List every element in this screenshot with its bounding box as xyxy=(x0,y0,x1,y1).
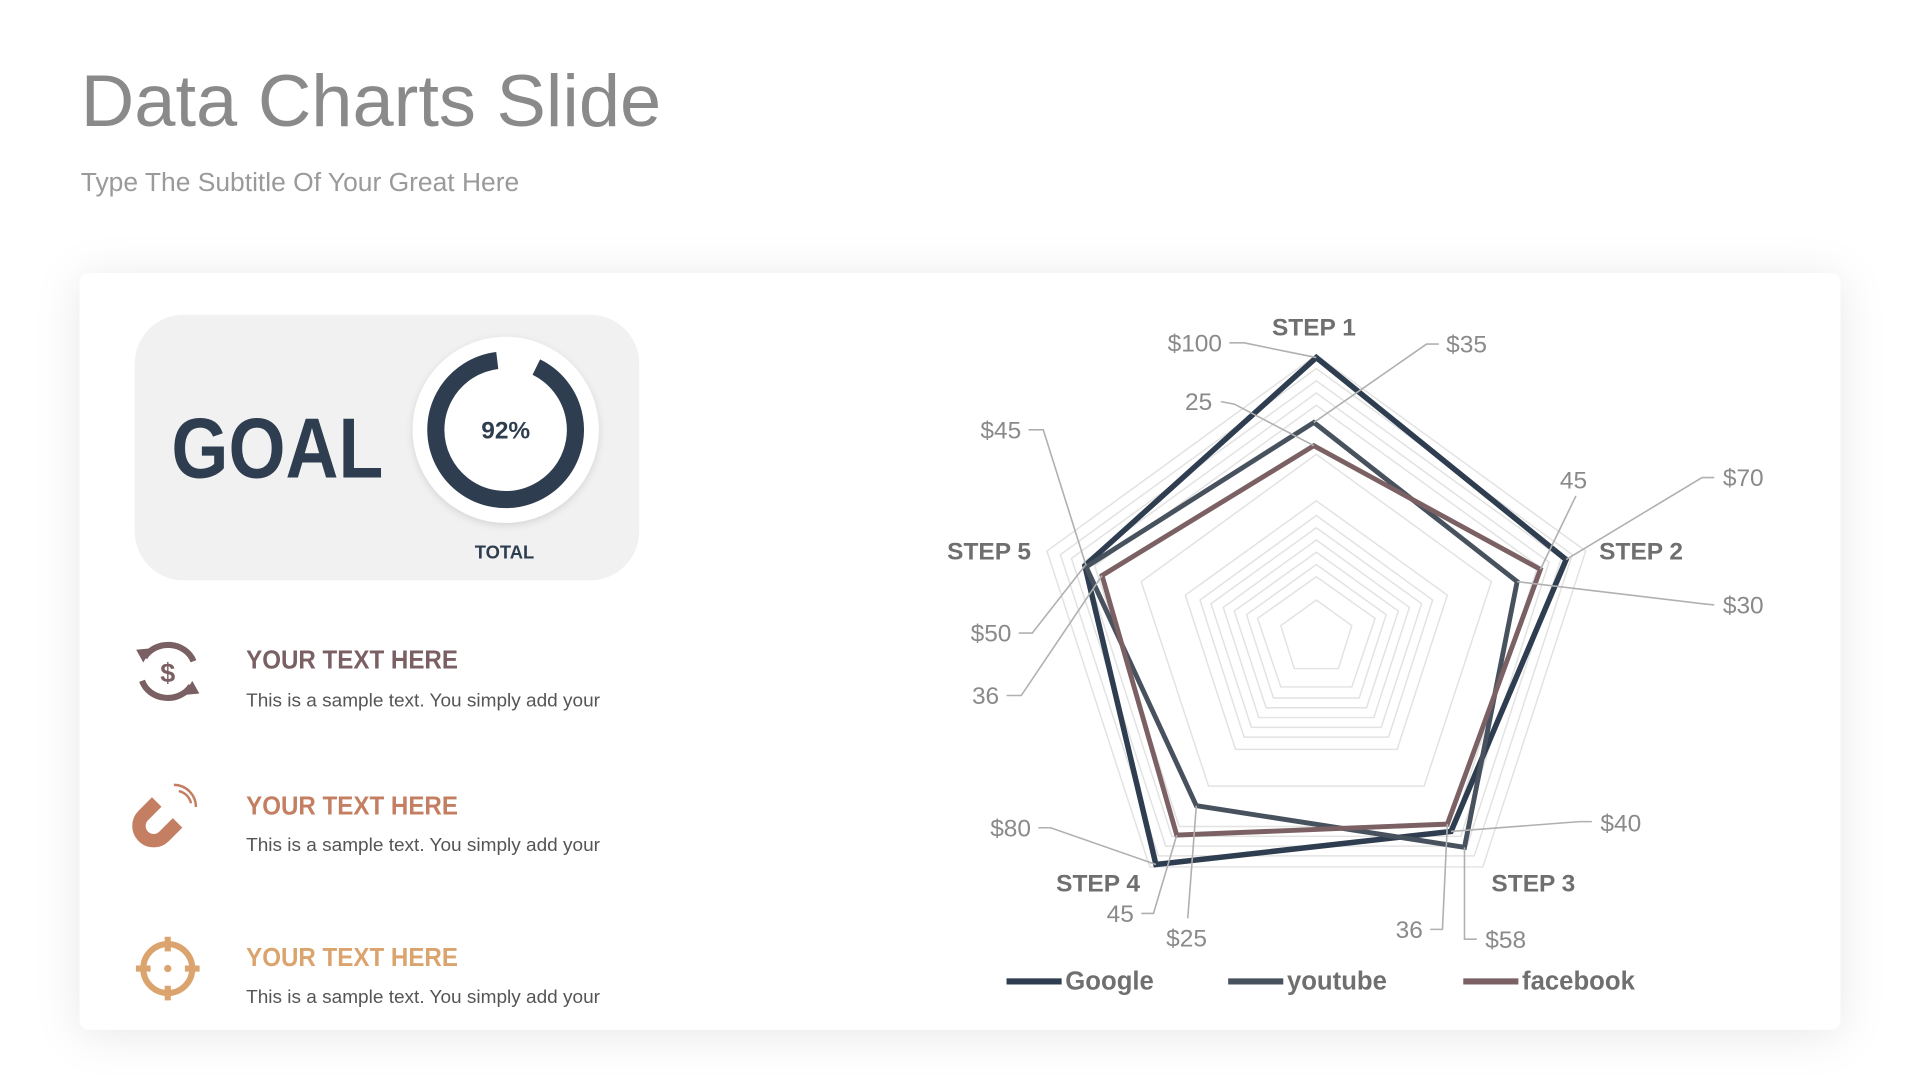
panel: main card xyxy=(80,273,1840,1030)
donut chart 92% xyxy=(413,337,599,523)
value labels: $35 xyxy=(1446,332,1487,359)
value labels: $80 xyxy=(990,815,1031,842)
donut chart 92%: 92% xyxy=(481,417,530,444)
value labels xyxy=(971,330,1764,954)
icon: target xyxy=(136,937,200,1000)
value labels: $30 xyxy=(1723,592,1764,619)
body: This is a sample text. You simply add your xyxy=(246,690,600,711)
step labels: STEP 2 xyxy=(1599,539,1683,566)
item 3 xyxy=(136,937,600,1007)
icon: magnet xyxy=(139,785,196,841)
value labels: $58 xyxy=(1485,927,1526,954)
value labels: 25 xyxy=(1185,389,1212,416)
value labels: 36 xyxy=(1396,917,1423,944)
value labels: 45 xyxy=(1560,468,1587,495)
item 2 xyxy=(139,785,600,855)
value labels: $100 xyxy=(1168,330,1222,357)
value labels: $70 xyxy=(1723,465,1764,492)
goal heading: GOAL xyxy=(171,401,383,497)
value labels: $40 xyxy=(1600,810,1641,837)
icon: dollar exchange xyxy=(137,645,198,698)
value labels: 36 xyxy=(972,683,999,710)
legend: Google xyxy=(1065,967,1154,995)
title: Data Charts Slide xyxy=(81,59,661,142)
heading: YOUR TEXT HERE xyxy=(246,647,458,675)
step labels: STEP 1 xyxy=(1272,315,1356,342)
value labels: 45 xyxy=(1107,901,1134,928)
body: This is a sample text. You simply add your xyxy=(246,834,600,855)
icon: dollar exchange: $ xyxy=(160,658,175,688)
series: google xyxy=(1085,358,1566,864)
leader lines xyxy=(1007,343,1714,939)
item 1 xyxy=(137,645,600,711)
value labels: $50 xyxy=(971,621,1011,648)
panel: goal box xyxy=(135,315,639,580)
subtitle: Type The Subtitle Of Your Great Here xyxy=(81,169,519,197)
value labels: $45 xyxy=(980,417,1021,444)
legend: youtube xyxy=(1287,967,1387,995)
step labels: STEP 4 xyxy=(1056,870,1140,897)
value labels: $25 xyxy=(1166,926,1207,953)
radar chart xyxy=(947,315,1764,954)
heading: YOUR TEXT HERE xyxy=(246,792,458,820)
legend: facebook xyxy=(1522,967,1636,995)
step labels xyxy=(947,315,1683,897)
body: This is a sample text. You simply add your xyxy=(246,986,600,1007)
step labels: STEP 3 xyxy=(1491,870,1575,897)
total label: TOTAL xyxy=(475,541,534,562)
step labels: STEP 5 xyxy=(947,539,1031,566)
legend xyxy=(1007,967,1636,995)
series: facebook xyxy=(1102,446,1540,835)
series: youtube xyxy=(1086,422,1517,847)
heading: YOUR TEXT HERE xyxy=(246,944,458,972)
